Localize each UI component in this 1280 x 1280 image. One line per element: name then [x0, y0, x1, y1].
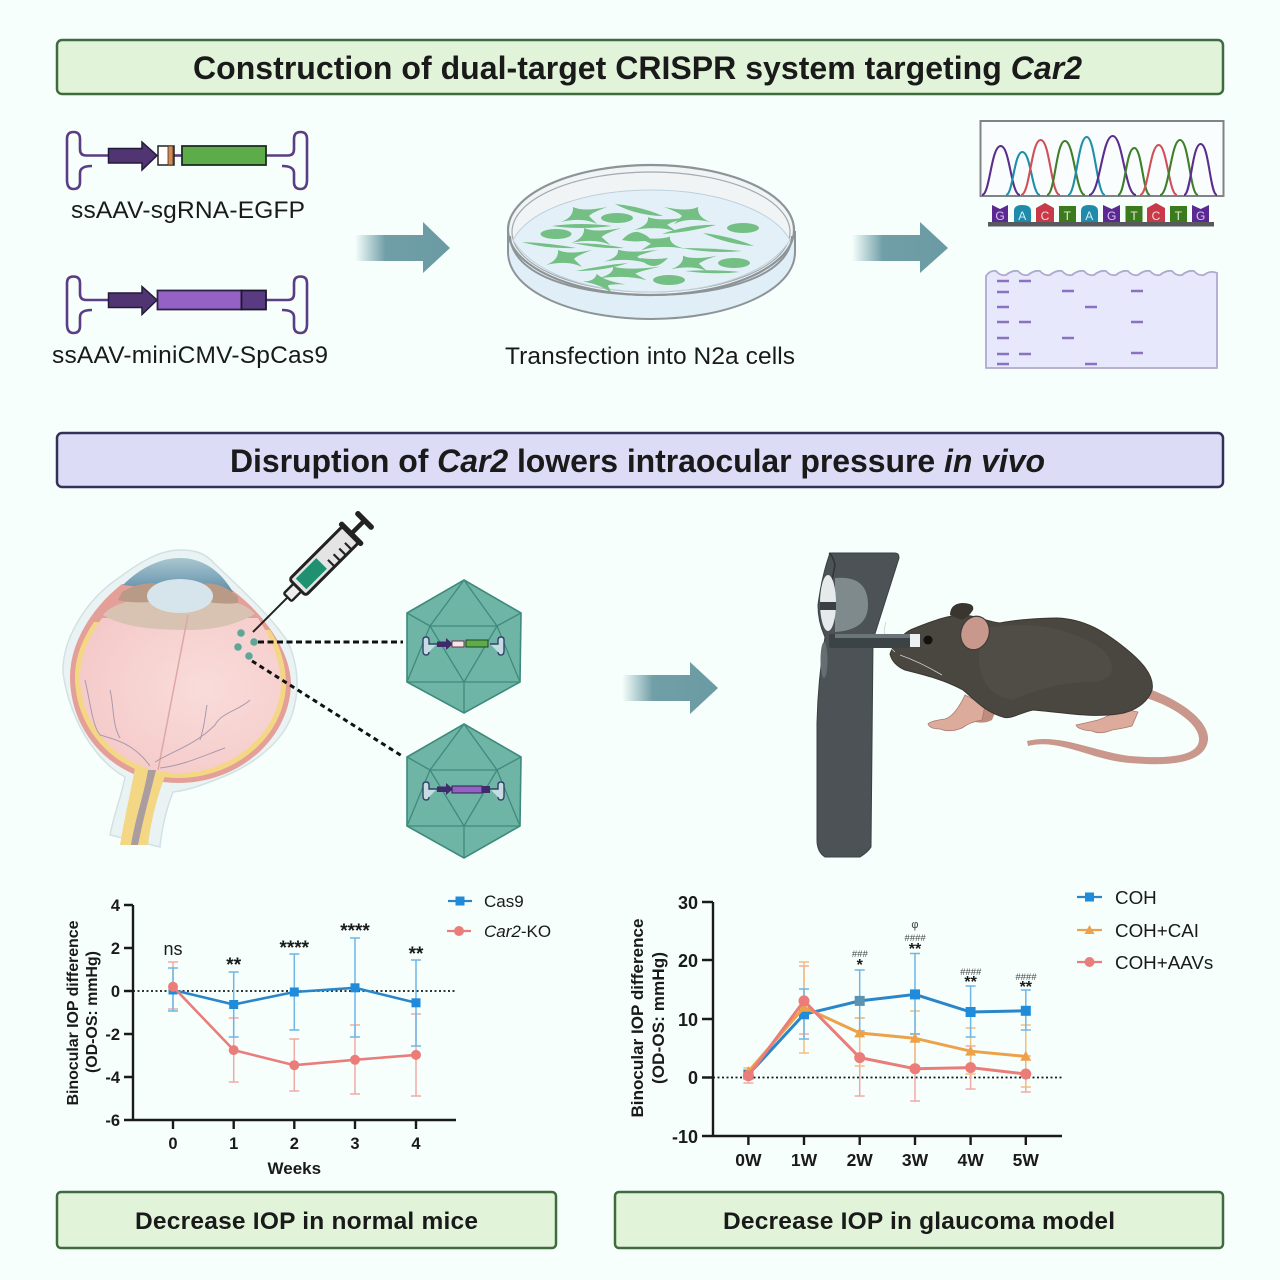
legend: Cas9	[484, 892, 524, 911]
arrow: injection to measurement	[622, 662, 718, 714]
vector: ssAAV-miniCMV-SpCas9	[52, 276, 328, 369]
arrow: cells to readouts	[852, 222, 948, 273]
y axis title: Binocular IOP difference	[65, 920, 82, 1106]
x tick labels: 5W	[1013, 1150, 1039, 1170]
caption: decrease IOP in glaucoma model	[615, 1192, 1223, 1248]
series: Car2-KO	[168, 982, 421, 1070]
x tick labels	[735, 1150, 1039, 1170]
error bars: COH	[799, 954, 1031, 1039]
icon: syringe	[242, 507, 378, 643]
sequence letters	[988, 203, 1214, 226]
icon: eye cross-section	[63, 550, 297, 847]
legend: COH+CAI	[1115, 920, 1199, 941]
x tick labels: 2W	[847, 1150, 873, 1170]
x tick labels: 3W	[902, 1150, 929, 1170]
significance marks: **	[1020, 979, 1033, 996]
x tick labels: 4	[411, 1135, 421, 1153]
y tick labels: 2	[111, 940, 120, 958]
chart: IOP in normal mice	[65, 892, 551, 1178]
y tick labels: 0	[688, 1068, 698, 1088]
icon: petri dish with N2a cells	[508, 165, 795, 319]
sequence letters: A	[1018, 209, 1026, 223]
legend: COH+AAVs	[1115, 952, 1213, 973]
arrow: vectors to cells	[355, 222, 450, 273]
x tick labels: 3	[350, 1135, 360, 1153]
x tick labels	[168, 1135, 421, 1153]
sequence letters: A	[1085, 209, 1093, 223]
x tick labels: 1	[229, 1135, 238, 1153]
y axis title: (OD-OS: mmHg)	[84, 951, 101, 1073]
sequence letters: G	[1107, 209, 1116, 223]
significance marks: ns	[163, 939, 183, 959]
zero line	[713, 1076, 1062, 1078]
significance marks: *	[857, 957, 864, 974]
y tick labels: 20	[678, 951, 698, 971]
significance marks: **	[909, 941, 922, 958]
icon: AAV capsid with sgRNA-EGFP	[407, 580, 521, 713]
y axis title	[628, 918, 668, 1118]
x tick labels: 2	[290, 1135, 299, 1153]
icon: mouse	[884, 603, 1208, 764]
icon: tonometer	[817, 553, 920, 857]
significance marks: ****	[280, 938, 310, 959]
x axis title: Weeks	[268, 1159, 321, 1178]
gel electrophoresis	[986, 271, 1217, 368]
axes	[124, 905, 456, 1129]
y tick labels: 0	[111, 983, 120, 1001]
heading: construction of dual-target CRISPR system: Construction of dual-target CRISPR system targeting Car2	[193, 50, 1082, 86]
heading: construction of dual-target CRISPR system	[57, 40, 1223, 94]
sequence letters: G	[1196, 209, 1205, 223]
error bars: Car2-KO	[168, 962, 421, 1096]
axes	[702, 902, 1062, 1145]
x tick labels: 0W	[735, 1150, 762, 1170]
sequence letters: T	[1130, 209, 1138, 223]
y tick labels: 4	[111, 897, 121, 915]
legend: Car2-KO	[484, 922, 551, 941]
series: COH+CAI	[743, 1002, 1031, 1076]
error bars: COH+AAVs	[743, 966, 1031, 1101]
legend	[447, 892, 551, 941]
significance marks: ####	[960, 967, 982, 978]
y tick labels: -2	[105, 1026, 120, 1044]
vector: ssAAV-sgRNA-EGFP: ssAAV-sgRNA-EGFP	[71, 197, 305, 224]
significance marks: **	[409, 944, 424, 965]
y tick labels: -6	[105, 1112, 120, 1130]
caption: decrease IOP in normal mice: Decrease IOP in normal mice	[135, 1208, 478, 1235]
legend: COH	[1115, 887, 1157, 908]
y tick labels: 10	[678, 1010, 698, 1030]
legend	[1077, 887, 1213, 973]
panel: AAV vectors	[52, 132, 328, 369]
y axis title: (OD-OS: mmHg)	[649, 952, 668, 1084]
sequence letters: T	[1175, 209, 1183, 223]
heading: disruption of Car2	[57, 433, 1223, 487]
y tick labels	[672, 893, 698, 1147]
significance marks: ####	[904, 933, 926, 944]
y tick labels: 30	[678, 893, 698, 913]
y tick labels	[105, 897, 121, 1130]
series: COH+AAVs	[743, 995, 1031, 1081]
error bars: Cas9	[168, 938, 421, 1046]
sequence letters: C	[1152, 209, 1161, 223]
y axis title: Binocular IOP difference	[628, 918, 647, 1118]
y axis title	[65, 920, 101, 1106]
significance marks: ****	[340, 921, 370, 942]
significance marks	[163, 921, 424, 976]
error bars: COH+CAI	[743, 962, 1031, 1087]
heading: disruption of Car2: Disruption of Car2 lowers intraocular pressure in vivo	[230, 443, 1045, 479]
vector: ssAAV-sgRNA-EGFP	[67, 132, 307, 224]
x tick labels: 0	[168, 1135, 178, 1153]
caption: decrease IOP in normal mice	[57, 1192, 556, 1248]
significance marks	[852, 919, 1037, 996]
significance marks: **	[964, 974, 978, 991]
dashed connector to capsid 2	[252, 661, 402, 756]
sequence letters: G	[995, 209, 1005, 223]
series: COH	[743, 989, 1031, 1080]
label: transfection: Transfection into N2a cells	[505, 343, 795, 370]
y tick labels: -10	[672, 1127, 698, 1147]
caption: decrease IOP in glaucoma model: Decrease IOP in glaucoma model	[723, 1208, 1115, 1235]
zero line	[133, 990, 456, 992]
chart: sequencing chromatogram	[980, 121, 1224, 196]
vector: ssAAV-miniCMV-SpCas9: ssAAV-miniCMV-SpCas9	[52, 342, 328, 369]
y tick labels: -4	[105, 1069, 121, 1087]
series: Cas9	[168, 983, 420, 1009]
significance marks: ###	[852, 949, 868, 960]
sequence letters: C	[1041, 209, 1050, 223]
icon: AAV capsid with SpCas9	[407, 724, 521, 858]
chart: IOP in glaucoma model	[628, 887, 1213, 1170]
significance marks: **	[226, 955, 242, 976]
dashed connector to capsid 1	[258, 640, 403, 644]
significance marks: ####	[1015, 972, 1037, 983]
x tick labels: 1W	[791, 1150, 818, 1170]
sequence letters: T	[1064, 209, 1072, 223]
x tick labels: 4W	[957, 1150, 984, 1170]
significance marks: φ	[911, 919, 919, 931]
